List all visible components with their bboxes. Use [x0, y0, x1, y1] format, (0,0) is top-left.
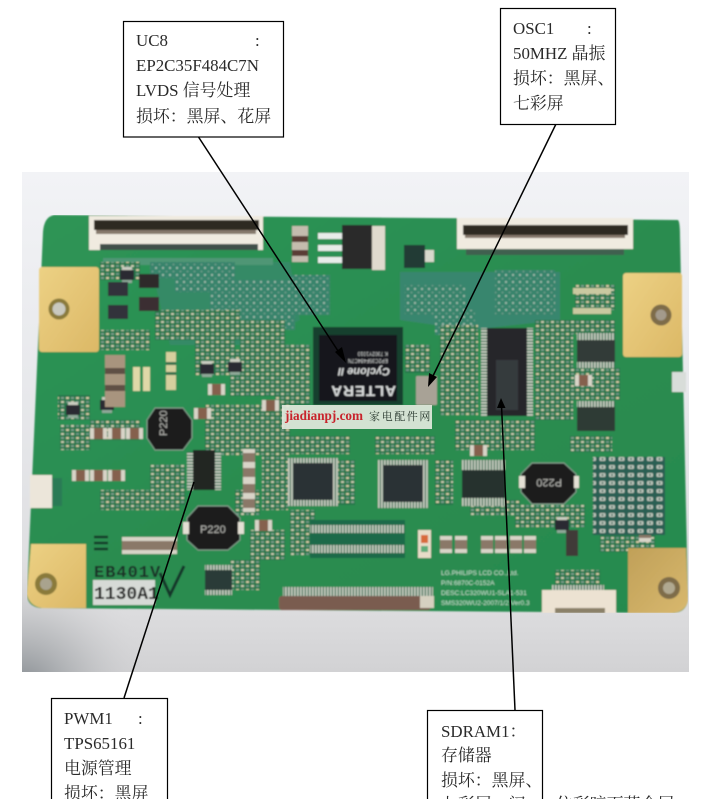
callout: PWM1: [52, 698, 168, 799]
callout: UC8: [124, 22, 284, 137]
PWM power IC: [187, 450, 221, 490]
FPGA chip UC8: ALTERA: [330, 382, 396, 399]
power inductors P220: P220: [536, 476, 562, 488]
callout: PWM1: 电源管理: [64, 759, 132, 778]
callout: SDRAM1: 损坏：黑屏、: [441, 771, 542, 790]
silkscreen: manufacturer text: LG.PHILIPS LCD CO.,Ltd.: [441, 570, 518, 577]
leader line: OSC1 to crystal: [428, 124, 556, 387]
watermark: [282, 405, 432, 429]
callout: OSC1: OSC1: [513, 19, 554, 38]
silkscreen: manufacturer text: P/N:6870C-0152A: [441, 580, 495, 587]
callout: UC8: 损坏：黑屏、花屏: [136, 107, 271, 126]
capacitor rows: [72, 408, 651, 558]
power inductors P220: [147, 408, 579, 550]
small transistors at left: [105, 274, 176, 407]
circuit board: [27, 215, 688, 613]
chips at right: [573, 288, 615, 431]
silkscreen: manufacturer text: [441, 570, 530, 607]
callout: PWM1: PWM1: [64, 709, 113, 728]
regulators at top: [292, 225, 434, 270]
QFP and SOIC chips: [205, 458, 505, 595]
gold mounting pads and holes: [27, 267, 688, 613]
callout: OSC1: [500, 8, 616, 124]
oscillator crystal OSC1: [416, 376, 437, 405]
callout: PWM1: :: [138, 709, 143, 728]
leader line: SDRAM1 to memory chip: [497, 398, 515, 710]
white connector bottom right: [542, 585, 616, 613]
white connector left edge: [30, 475, 62, 508]
callout: SDRAM1: SDRAM1：: [441, 722, 526, 741]
callout: OSC1: 50MHZ 晶振: [513, 43, 606, 63]
silkscreen: manufacturer text: DESC:LC320WU1-SLA1-531: [441, 590, 527, 597]
silkscreen: manufacturer text: SMS320WU2-2007/1/2 Ver0.3: [441, 600, 530, 607]
SDRAM chip: [481, 328, 533, 416]
right edge tab: [672, 372, 686, 392]
leader line: UC8 to FPGA: [198, 137, 346, 363]
callout: UC8: EP2C35F484C7N: [136, 56, 259, 75]
FPGA chip UC8: K 7302Y1010: [357, 350, 388, 356]
power inductors P220: P220: [158, 410, 170, 436]
leader line: PWM1 to power IC: [124, 482, 194, 698]
power inductors P220: P220: [200, 524, 226, 536]
callout: OSC1: 损坏：黑屏、: [513, 69, 614, 88]
bottom flat connector: [279, 587, 434, 610]
trace regions: [103, 258, 560, 345]
silkscreen: board code label: 1130A1: [94, 585, 159, 605]
silkscreen: board code label: [93, 537, 184, 605]
SMD component fields: [58, 262, 655, 590]
photo: LCD T-CON circuit board: [22, 172, 689, 672]
small dark components: [66, 267, 607, 533]
watermark: jiadianpj.com: [284, 408, 364, 423]
dot matrix resistor field: [593, 457, 665, 535]
board substrate: [27, 215, 688, 613]
FPGA chip UC8: Cyclone II: [337, 365, 390, 377]
callout: OSC1: :: [587, 19, 592, 38]
watermark: 家电配件网: [369, 409, 432, 423]
callout: PWM1: TPS65161: [64, 734, 135, 753]
callout: SDRAM1: [428, 710, 542, 799]
silkscreen: board code label: EB401V: [94, 564, 161, 583]
callout: SDRAM1: 存储器: [441, 746, 492, 765]
callout: OSC1: 七彩屏: [513, 94, 564, 113]
callout: UC8: UC8: [136, 31, 168, 50]
FPGA chip UC8: EP2C35F484C7N: [348, 357, 388, 363]
callout: UC8: LVDS 信号处理: [136, 81, 250, 100]
callout: UC8: :: [255, 31, 260, 50]
photo background: [22, 172, 689, 672]
FPGA chip UC8: [313, 327, 403, 405]
flat cable connector: top right: [457, 218, 633, 255]
flat cable connector: top left: [89, 216, 263, 250]
